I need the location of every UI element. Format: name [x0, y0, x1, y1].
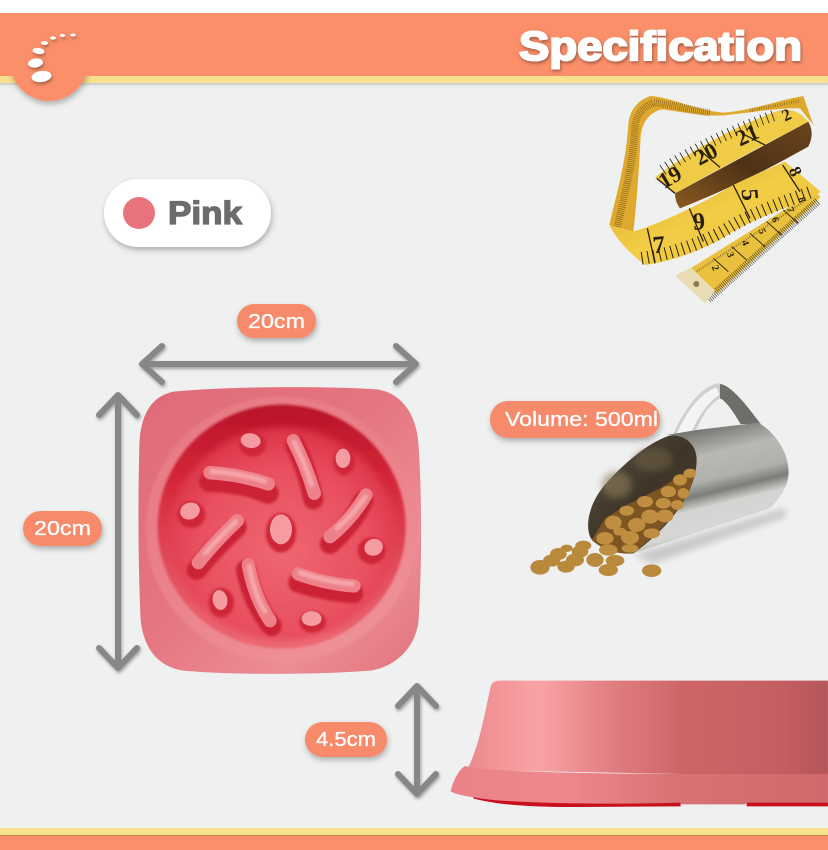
bowl side view [451, 681, 828, 807]
chip background [104, 179, 271, 247]
lower band [609, 162, 821, 265]
bowl body [138, 387, 421, 674]
tape numbers: 7 [651, 231, 666, 259]
bowl lip [451, 766, 828, 804]
arrow: width [142, 346, 416, 382]
tape numbers: 2 [709, 264, 721, 272]
width label: 20cm [248, 311, 305, 333]
tape numbers [651, 105, 808, 272]
tape numbers: 5 [736, 188, 763, 202]
tape numbers: 2 [779, 105, 794, 125]
volume label [490, 401, 660, 438]
red base underside [473, 797, 828, 807]
height label: 4.5cm [316, 729, 376, 751]
rim ring [146, 397, 418, 662]
depth label [23, 511, 102, 546]
scoop mouth [588, 436, 697, 554]
volume label: Volume: 500ml [505, 409, 658, 431]
scoop shadow [633, 508, 787, 563]
colour chip: pink [104, 179, 271, 247]
chip label: Pink [168, 195, 242, 231]
arrow: height [398, 686, 436, 794]
height label [305, 722, 387, 757]
bowl floor [170, 428, 395, 640]
bowl top view [138, 387, 421, 674]
title: Specification [519, 23, 802, 69]
tape numbers: 20 [690, 138, 722, 170]
tape numbers: 3 [724, 251, 736, 259]
metal tip [675, 267, 715, 303]
chip swatch [123, 197, 155, 229]
bowl wall [467, 681, 828, 777]
top band [655, 110, 808, 193]
logo icon: dots [27, 34, 76, 83]
tape numbers: 21 [732, 119, 763, 151]
tape numbers: 7 [784, 206, 796, 214]
coil [675, 122, 812, 208]
footer band [0, 828, 828, 850]
tape numbers: 8 [785, 164, 806, 180]
scoop body [633, 423, 789, 553]
scoop handle [673, 383, 761, 435]
inner wall [158, 405, 406, 649]
tape numbers: 5 [755, 227, 768, 236]
top white margin [0, 0, 828, 13]
depth label: 20cm [34, 518, 91, 540]
tape numbers: 8 [795, 196, 808, 204]
dots [177, 432, 386, 633]
food scoop [530, 383, 789, 577]
tape numbers: 6 [769, 216, 781, 224]
arrow: depth [99, 395, 137, 668]
ridges [197, 441, 366, 626]
width label [237, 304, 316, 338]
tape numbers: 4 [739, 239, 751, 247]
loose kibble [530, 541, 661, 577]
measuring tape image [609, 96, 821, 303]
second ribbon [677, 192, 821, 293]
tape numbers: 19 [654, 161, 686, 194]
tape numbers: 9 [691, 208, 706, 236]
header band [0, 13, 828, 101]
kibble pile [592, 468, 695, 554]
thin back strip [609, 96, 813, 232]
